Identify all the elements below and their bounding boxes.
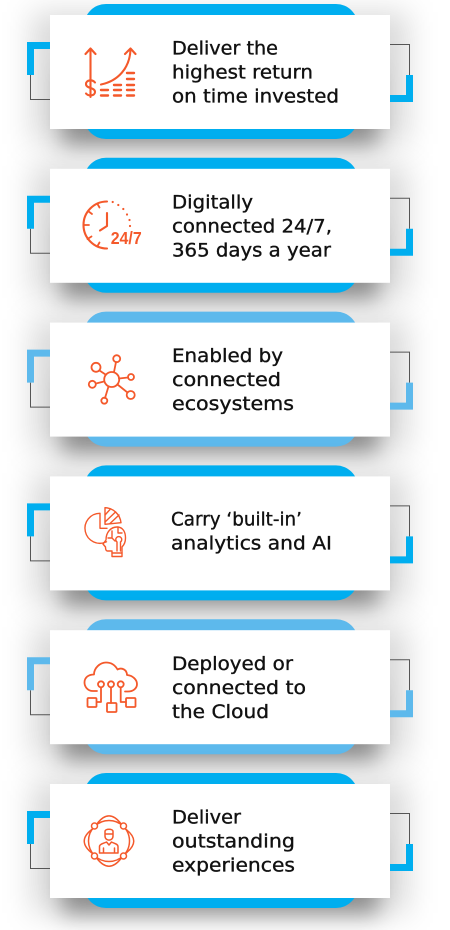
icon: growth chart [86, 48, 136, 97]
blue pill [84, 312, 358, 447]
right bracket [390, 229, 413, 256]
text: Deliver the [172, 38, 278, 60]
blue pill [84, 465, 358, 600]
left bracket [27, 657, 50, 690]
panel: row 4 [27, 465, 413, 607]
icon: person in orbit [84, 816, 134, 866]
card [50, 323, 390, 437]
card [50, 784, 390, 898]
text [172, 654, 306, 723]
text [171, 509, 332, 554]
blue pill [84, 619, 358, 754]
left bracket [27, 196, 50, 229]
icon: clock 24/7 [83, 201, 142, 248]
right bracket [390, 690, 413, 717]
right bracket [390, 536, 413, 563]
card [50, 169, 390, 283]
text: outstanding [172, 832, 295, 852]
text: on time invested [172, 86, 339, 108]
text [172, 808, 295, 876]
text: Deliver [172, 808, 241, 828]
text: connected to [172, 678, 306, 699]
icon: cloud [84, 662, 137, 712]
blue pill [84, 4, 358, 139]
text: highest return [172, 62, 313, 84]
text: Carry ‘built-in’ [171, 509, 302, 530]
text: the Cloud [172, 702, 269, 723]
text: connected [172, 370, 281, 391]
icon: clock 24/7: 24/7 [111, 228, 142, 248]
text: Enabled by [172, 346, 283, 367]
panel: row 5 [27, 619, 413, 761]
text: analytics and AI [171, 533, 332, 554]
right bracket [390, 75, 413, 102]
text: 365 days a year [172, 240, 331, 261]
blue pill [84, 773, 358, 908]
text: connected 24/7, [172, 216, 332, 237]
text: ecosystems [172, 394, 294, 415]
right bracket [390, 383, 413, 410]
panel: row 2 [27, 158, 413, 300]
icon: pie chart and head [85, 508, 126, 556]
panel: row 6 [27, 773, 413, 915]
panel: row 3 [27, 312, 413, 454]
text: Digitally [172, 192, 253, 213]
text [172, 192, 332, 261]
card [50, 476, 390, 590]
card [50, 630, 390, 744]
left bracket [27, 42, 50, 75]
blue pill [84, 158, 358, 293]
text [172, 346, 294, 415]
card [50, 15, 390, 129]
text: experiences [172, 856, 295, 876]
left bracket [27, 350, 50, 383]
text: Deployed or [172, 654, 293, 675]
text [172, 38, 339, 108]
icon: network [89, 355, 135, 404]
left bracket [27, 503, 50, 536]
right bracket [390, 844, 413, 871]
left bracket [27, 811, 50, 844]
panel: row 1 [27, 4, 413, 146]
